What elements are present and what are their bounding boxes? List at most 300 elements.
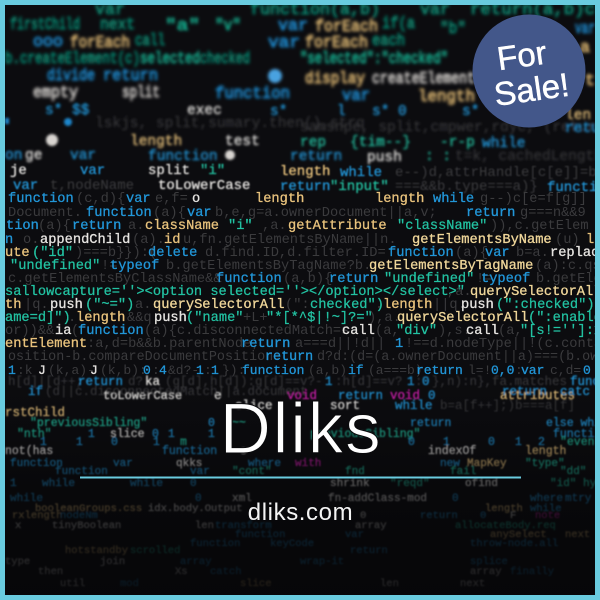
code rows: sharp middle: != [476, 272, 492, 287]
code rows: lower fading: where [530, 493, 563, 505]
code rows: heavily blurred top: display [305, 70, 365, 89]
code rows: lightly blurred: ===&&b.type===a)} [395, 179, 538, 195]
code rows: sharp middle: a. [135, 298, 151, 313]
code rows: lower fading: m [180, 436, 187, 449]
code rows: sharp middle: ,a. [447, 285, 472, 300]
code rows: sharp middle: u,fn.getElementsByName||n. [183, 233, 397, 248]
code rows: lower fading: idx.body.Output [148, 503, 243, 515]
code rows: sharp middle: J [90, 363, 98, 378]
code rows: lower fading: slice [110, 428, 145, 441]
code rows: sharp middle: a===d||!d|| [295, 337, 385, 352]
code rows: lower fading: hotstandby [65, 545, 128, 557]
code rows: sharp middle: function [216, 272, 282, 287]
code rows: lightly blurred: length [280, 164, 330, 180]
code rows: sharp middle: ||q. [433, 298, 466, 313]
code rows: lower fading: func [570, 375, 600, 389]
code rows: lower fading [5, 375, 600, 590]
code rows: sharp middle: push [154, 311, 187, 326]
code rows: sharp middle: (a){ [153, 206, 186, 221]
code rows: mid blurred: function [148, 149, 218, 165]
code rows: sharp middle: ia [55, 324, 71, 339]
code rows: lower fading: note [535, 510, 560, 522]
code rows: sharp middle: d.find.ID,d.filter.ID= [205, 246, 386, 261]
code rows: heavily blurred top [5, 1, 595, 107]
code rows: mid blurred: s* [462, 104, 479, 120]
code rows: lower fading: length [485, 503, 523, 515]
code rows: lower fading: xml [232, 493, 252, 505]
code rows: lower fading: throw-node.all [470, 538, 558, 550]
code rows: lower fading: new [440, 458, 460, 470]
code rows: sharp middle: l=! [468, 363, 491, 378]
code rows: lower fading: "previousSibling" [30, 417, 147, 430]
code rows: lower fading: h[d]|[d++; [8, 375, 83, 389]
code rows: lower fading: function [55, 466, 108, 478]
code rows: sharp middle: typeof [481, 272, 530, 287]
code rows: sharp middle: function [78, 324, 144, 339]
code rows: sharp middle: return [329, 272, 378, 287]
code rows: sharp middle: "div" [396, 324, 437, 339]
code rows: sharp middle: function [86, 206, 152, 221]
bottom darkening overlay [0, 370, 600, 600]
code rows: sharp middle: function [8, 192, 74, 207]
code rows: lower fading: next [460, 578, 485, 590]
code rows: sharp middle: length [383, 298, 432, 313]
code rows: lower fading: tinyBoolean [52, 520, 121, 532]
code rows: lightly blurred: split [148, 163, 190, 179]
code rows: sharp middle: 1 [395, 337, 403, 352]
code rows: lower fading: Xs [175, 566, 188, 578]
code rows: heavily blurred top: call [135, 32, 165, 51]
code rows: sharp middle: b.getEle [536, 272, 600, 287]
code rows: lower fading: function [162, 445, 217, 458]
code rows: sharp middle: (a===b) [368, 363, 423, 378]
code rows: sharp middle: osition-b.compareDocumentPosition: [8, 350, 281, 365]
code rows: lightly blurred: je [10, 163, 27, 179]
code rows: sharp middle: &d?- [168, 363, 199, 378]
code rows: lower fading: array [470, 566, 502, 578]
code rows: heavily blurred top: next [100, 16, 135, 35]
code rows: sharp middle: : [204, 363, 212, 378]
code rows: sharp middle: )===b}}):( [75, 246, 157, 261]
code rows: heavily blurred top: selected [140, 50, 200, 69]
code rows: sharp middle: return [416, 363, 463, 378]
code rows: mid blurred: while [482, 136, 526, 152]
code rows: lower fading: e [214, 389, 222, 403]
code rows: lower fading: F [510, 510, 516, 522]
code rows: sharp middle: (a,b){ [283, 272, 332, 287]
code rows: lower fading: void [390, 389, 420, 403]
code rows: lower fading: var [345, 529, 364, 541]
code rows: lower fading: 1 [88, 428, 95, 441]
badge text: Sale! [492, 66, 571, 113]
code rows: heavily blurred top: return [103, 67, 158, 86]
code rows: lower fading: 1 [325, 375, 333, 389]
code rows: sharp middle: getElementsByTagName [369, 259, 533, 274]
code rows: lower fading: toLowerCase [103, 389, 182, 403]
code rows: lower fading: nodeNm [60, 510, 98, 522]
code rows: lower fading: var [113, 458, 133, 470]
code rows: sharp middle: return [265, 350, 313, 365]
code rows: lightly blurred: "input" [330, 179, 389, 195]
code rows: lower fading: scrolled [130, 545, 180, 557]
domain url: dliks.com [248, 499, 353, 526]
code rows: mid blurred: ge [25, 148, 42, 164]
code rows: sharp middle: != [101, 259, 117, 274]
code rows: sharp middle: (c,d){ [76, 192, 125, 207]
code rows: heavily blurred top: function(a,b) [250, 1, 380, 20]
code rows: sharp middle: ute [5, 246, 30, 261]
code rows: lower fading: while [10, 493, 43, 505]
code rows: heavily blurred top: firstChild [10, 16, 80, 35]
code rows: sharp middle: g===n&&9 [520, 206, 586, 221]
code rows: lower fading: MapKey [467, 458, 507, 470]
code rows: lower fading: mod [120, 578, 139, 590]
code rows: lower fading: fn-addClass-mod [328, 493, 427, 505]
code rows: heavily blurred top: var [268, 34, 300, 53]
code rows: lightly blurred: return [280, 179, 330, 195]
code rows: sharp middle: 0,0 [491, 363, 514, 378]
code rows: sharp middle: o [192, 192, 200, 207]
code rows: lower fading: 1 [208, 428, 215, 441]
code rows: lower fading: ofind [465, 478, 498, 490]
code rows: lightly blurred: "i" [200, 163, 225, 179]
code rows: lower fading: 1 [153, 436, 160, 449]
code rows: lower fading: mtry [565, 493, 592, 505]
badge text [487, 31, 571, 113]
code rows: lower fading: "dd" [560, 466, 586, 478]
code rows: sharp middle: className [145, 219, 219, 234]
code rows: lower fading: while [530, 503, 562, 515]
code rows: mid blurred: retu [565, 121, 600, 137]
code rows: sharp middle: ),a. [368, 311, 401, 326]
code rows: lower fading: functi [553, 428, 595, 441]
code rows: sharp middle: push [50, 298, 83, 313]
code rows: lower fading: 0 [195, 493, 202, 505]
code rows: lower fading: : [415, 375, 423, 389]
code rows: lower fading: return [420, 510, 458, 522]
code rows: mid blurred: return [290, 149, 342, 165]
code rows: heavily blurred top: ooo [33, 33, 63, 52]
title: Dliks: Dliks [220, 390, 382, 469]
code rows: lower fading: slice [240, 578, 272, 590]
code rows: lightly blurred: toLowerCase [158, 178, 250, 194]
code rows: lower fading: return [78, 375, 123, 389]
code rows: sharp middle: (a){c.disconnectedMatch=s. [144, 324, 358, 339]
code rows: lower fading: function [235, 529, 285, 541]
code rows: lower fading: "reqd" [390, 478, 430, 490]
code rows: lower fading: then [38, 566, 63, 578]
code rows: sharp middle: . [375, 298, 383, 313]
code rows: lower fading: previousSibling" [310, 428, 420, 441]
code rows: lower fading: with [295, 458, 321, 470]
code rows: heavily blurred top: var [420, 1, 450, 20]
code rows: heavily blurred top: split [122, 84, 160, 103]
code rows: lower fading: wrap-it [300, 556, 344, 568]
code rows: sharp middle: o. [23, 233, 39, 248]
code rows: lower fading: 1 [515, 436, 522, 449]
code rows: sharp middle: : [152, 363, 160, 378]
code rows: lower fading: function [190, 538, 240, 550]
code rows: mid blurred: push [367, 150, 402, 166]
code rows: sharp middle: (k,b): [100, 363, 147, 378]
code rows: heavily blurred top: return(a,b)c [470, 1, 595, 20]
code rows: lower fading: ka [145, 375, 161, 389]
code rows: lower fading: var [190, 466, 210, 478]
code rows: sharp middle: appendChild [40, 233, 130, 248]
code rows: mid blurred: rep [300, 135, 326, 151]
code rows: lower fading: len [380, 578, 399, 590]
code rows: heavily blurred top: var [95, 1, 125, 20]
code rows: lower fading: keyCode [270, 538, 314, 550]
code rows: lower fading: sort [330, 399, 360, 413]
code rows: lower fading: 0 [208, 417, 215, 430]
code rows: sharp middle: (": [285, 298, 310, 313]
code rows: sharp middle: return [241, 337, 290, 352]
code rows: sharp middle: (a){ [455, 246, 488, 261]
code rows: sharp middle: length [375, 192, 424, 207]
code rows: lower fading: 0 [152, 428, 159, 441]
code rows: sharp middle: n [5, 233, 13, 248]
code rows: mid blurred: var [70, 148, 96, 164]
code rows: sharp middle: while [433, 192, 474, 207]
code rows: sharp middle: (":checked") [496, 298, 595, 313]
code rows: sharp middle: "undefined" [10, 259, 100, 274]
code rows: mid blurred: len [565, 108, 591, 124]
code rows: sharp middle: if [348, 363, 364, 378]
code rows: heavily blurred top: "b" [440, 20, 466, 39]
code rows: sharp middle: Document. [8, 206, 82, 221]
code rows: lower fading: 0 [190, 478, 197, 490]
code rows: lower fading: next [565, 529, 590, 541]
code rows: lower fading: rxlength [12, 510, 62, 522]
code rows: sharp middle: sallowcapture=''><option selected=''></option></select>" [5, 285, 465, 300]
code rows: lower fading: rstChild [5, 406, 65, 420]
code rows: sharp middle: ("~=") [85, 298, 134, 313]
code rows: heavily blurred top: forEach [305, 34, 368, 53]
code rows: heavily blurred top: a [580, 39, 590, 58]
code rows: mid blurred: s* [270, 104, 287, 120]
code rows: lower fading: 1 [443, 436, 450, 449]
code rows: lower fading: where [248, 458, 281, 470]
code rows: heavily blurred top: empty [33, 84, 78, 103]
code rows: sharp middle: 4 [159, 363, 167, 378]
code rows: sharp middle: 1 [196, 363, 204, 378]
code rows: sharp middle: ,a. [262, 219, 287, 234]
code rows: heavily blurred top: var [278, 17, 308, 36]
code rows: lower fading: "nth" [17, 428, 52, 441]
code rows: lower fading: 1 [168, 428, 175, 441]
code rows: lower fading: 1 [76, 436, 83, 449]
code rows: lower fading: fnd [345, 466, 365, 478]
code rows: lower fading: "cont" [232, 466, 272, 478]
code rows: lower fading: (d||c.disconnectedMatch||a.document [45, 385, 308, 399]
code rows: lower fading: qkks [176, 458, 202, 470]
code rows: sharp middle: typeof [110, 259, 159, 274]
code rows: sharp middle: ( [71, 324, 79, 339]
code rows: lower fading: return [410, 417, 451, 430]
code rows: lower fading: catc [560, 385, 590, 399]
code rows: lower fading: 1 [10, 478, 17, 490]
code rows: lightly blurred: functi [547, 180, 597, 196]
code rows: lightly blurred: t,nodeName [50, 178, 134, 194]
code rows: lower fading: splice [470, 556, 508, 568]
code rows: mid blurred: : : [425, 149, 451, 165]
code rows: lower fading: while [395, 399, 433, 413]
code rows: lower fading: else whi [546, 417, 600, 430]
code rows: lower fading: 0 [480, 510, 486, 522]
code rows: lower fading: x [15, 520, 21, 532]
code rows: lower fading: 0 [111, 436, 118, 449]
code rows: lower fading: },n):n},fa.matches [432, 375, 567, 389]
code rows: lower fading: length [525, 445, 566, 458]
code rows: sharp middle: g--)c[e=f[g]] [480, 192, 587, 207]
code rows: sharp middle: getAttribute [288, 219, 387, 234]
code rows: sharp middle: c,d= [550, 363, 581, 378]
code rows: lower fading: return [350, 545, 388, 557]
code rows: sharp middle: ),s. [438, 324, 471, 339]
code rows: lower fading: attributes [500, 389, 575, 403]
code rows: lower fading: shrink [330, 478, 370, 490]
code rows: sharp middle: id [164, 233, 180, 248]
code rows: lower fading: 0 [488, 436, 495, 449]
code rows: lower fading: array [180, 556, 212, 568]
code rows: lower fading: not(has [5, 445, 53, 458]
code rows: heavily blurred top: t [585, 72, 595, 91]
code rows: lower fading: fail [450, 466, 476, 478]
code rows: lower fading: return [338, 389, 383, 403]
code rows: sharp middle: ("id" [32, 246, 73, 261]
code rows: mid blurred: length [130, 134, 182, 150]
code rows: lower fading: transform [215, 520, 272, 532]
code rows: lower fading: 1 [407, 375, 415, 389]
code rows: sharp middle: var [187, 206, 212, 221]
code rows: lower fading: 0 [408, 436, 415, 449]
code rows: lower fading: void [287, 389, 317, 403]
code rows: lower fading: 0 [422, 375, 430, 389]
code rows: sharp middle: function [388, 246, 454, 261]
code rows: sharp middle [5, 192, 600, 378]
divider under title [80, 476, 521, 478]
code rows: mid blurred: {tim--} [350, 135, 411, 151]
code rows: lightly blurred: e--)d,attrHandle[c[e]]=b [395, 165, 597, 181]
badge text: For [495, 34, 549, 77]
code rows: mid blurred: t=k, cachedLength [455, 149, 600, 165]
code rows: lower fading: array [355, 520, 387, 532]
code rows: sharp middle: 0 [143, 363, 151, 378]
code rows: sharp middle: "*[*^$|!~]?=" [266, 311, 373, 326]
badge: For Sale [472, 14, 586, 128]
code rows: sharp middle: getElementsByName [412, 233, 552, 248]
code rows: mid blurred: -r-p [440, 135, 475, 151]
code rows: sharp middle: (a, [375, 324, 400, 339]
code rows: sharp middle: : [515, 363, 523, 378]
code rows: lightly blurred: while [340, 165, 382, 181]
code rows: sharp middle: 0 [583, 363, 591, 378]
code rows: heavily blurred top: "v" [215, 17, 241, 36]
code rows: sharp middle: var [126, 192, 151, 207]
code rows: mid blurred: on [5, 148, 22, 164]
code rows: sharp middle: call [466, 324, 499, 339]
code rows: heavily blurred top: "a" [165, 17, 200, 36]
code rows: lower fading: 0 [360, 510, 366, 522]
code rows: sharp middle: l [586, 233, 594, 248]
code rows: heavily blurred top: var [342, 87, 370, 106]
code rows: lower fading: s [240, 445, 247, 458]
code rows: lower fading: util [60, 578, 85, 590]
code rows: sharp middle: )),c.getElem [490, 219, 589, 234]
code rows: lower fading: type [5, 556, 30, 568]
code rows: sharp middle: 1 [8, 363, 16, 378]
code rows: heavily blurred top: b.createElement(c) [5, 50, 140, 69]
code rows: lower fading: 2 [538, 436, 545, 449]
code rows: sharp middle: }): [222, 363, 245, 378]
code rows: sharp middle: or))&& [5, 324, 54, 339]
code rows: lower fading: "type" [525, 458, 565, 470]
code rows: sharp middle: (a):c.qs [535, 259, 600, 274]
code rows: mid blurred: s* [45, 103, 62, 119]
code rows: lower fading: 0 [452, 493, 459, 505]
code rows: lower fading: 1 [40, 436, 47, 449]
code rows: sharp middle: 1 [211, 363, 219, 378]
code rows: heavily blurred top: divide [47, 67, 95, 86]
code rows: sharp middle: "undefined" [384, 272, 474, 287]
code rows: sharp middle: :a,d=b&&b.parentNode; [87, 337, 260, 352]
code rows: sharp middle: "className" [397, 219, 487, 234]
code rows: sharp middle: function [242, 363, 304, 378]
code rows: lower fading: indexOf [428, 445, 476, 458]
code rows: mid blurred: 0 [398, 104, 407, 120]
code rows: lower fading: while [130, 478, 163, 490]
code rows: heavily blurred top: createElement [372, 70, 475, 89]
code rows: mid blurred: l [337, 104, 346, 120]
code rows: sharp middle: |q. [24, 298, 49, 313]
code rows: heavily blurred top: forEach [315, 18, 378, 37]
code rows: sharp middle: (a). [132, 233, 165, 248]
code rows: sharp middle: b,e,g=a.ownerDocument||a,v; [215, 206, 437, 221]
code rows: lower fading: b=a[f++];)b===a[f] [440, 399, 575, 413]
code rows: sharp middle: call [342, 324, 375, 339]
code rows: lower fading: if [28, 385, 43, 399]
code rows: sharp middle: ("name" [186, 311, 244, 326]
code rows: heavily blurred top: checked [200, 50, 250, 69]
code rows: lower fading: ~~ [232, 417, 246, 430]
code rows: lightly blurred: var [13, 178, 38, 194]
code rows: lower fading: d? [128, 375, 143, 389]
code rows: lightly blurred [10, 163, 597, 196]
code rows: sharp middle: (k,a)- [48, 363, 95, 378]
code rows: sharp middle: b=a. [516, 246, 549, 261]
code rows: sharp middle: . [68, 311, 76, 326]
code rows: sharp middle: ame=d]") [5, 311, 71, 326]
code rows: lower fading: len [195, 520, 214, 532]
code rows: heavily blurred top: "selected":"checked" [300, 50, 448, 69]
code rows: sharp middle: push [461, 298, 494, 313]
code rows: sharp middle: :k [17, 363, 33, 378]
code rows: sharp middle: return [72, 219, 121, 234]
code rows: lower fading: while [42, 478, 75, 490]
code rows: lower fading: slice [235, 399, 273, 413]
code rows: mid blurred: lskjs, split,sumary.then(),strq [95, 116, 373, 132]
code rows: sharp middle: var [521, 363, 544, 378]
code rows: heavily blurred top: length [418, 88, 475, 107]
code rows: sharp middle: querySelectorAll [470, 285, 600, 300]
code rows: sharp middle: th [5, 298, 21, 313]
code rows: sharp middle: var [485, 246, 510, 261]
code rows: heavily blurred top: if(a [382, 15, 415, 34]
code rows: sharp middle: +L+ [243, 311, 268, 326]
code rows: mid blurred: exec [187, 103, 222, 119]
code rows: heavily blurred top: function [215, 85, 290, 104]
